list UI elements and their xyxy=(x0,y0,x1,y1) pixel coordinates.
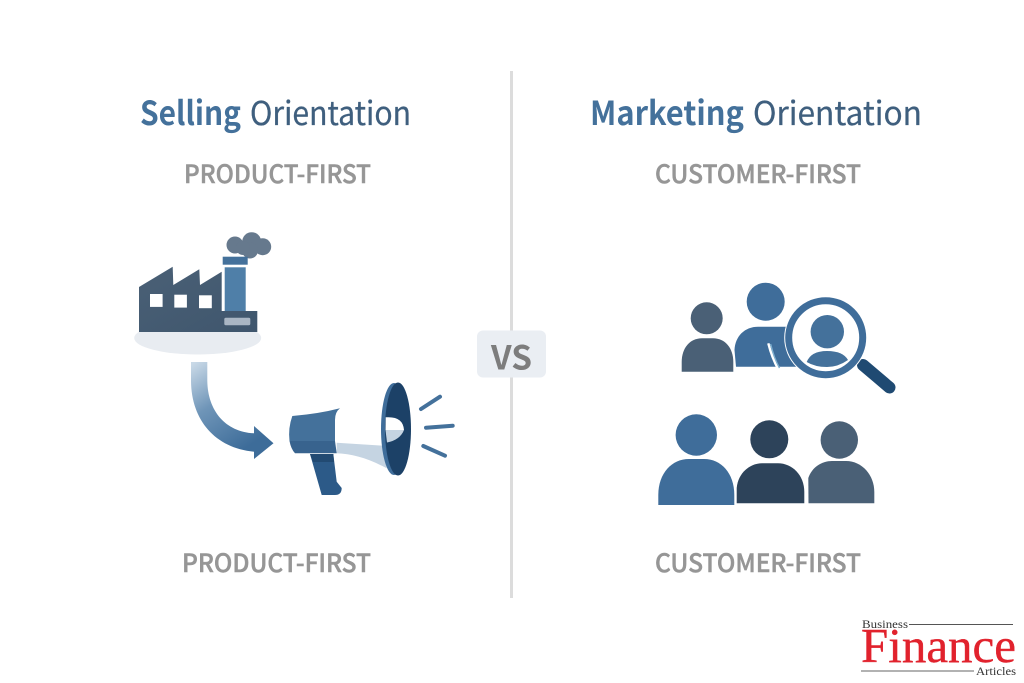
heading: selling orientation: Selling xyxy=(140,87,241,135)
heading: marketing orientation: Orientation xyxy=(753,87,922,135)
vs badge: VS xyxy=(490,332,532,380)
icon: magnifying glass xyxy=(784,296,890,388)
subheading: customer-first bottom: CUSTOMER-FIRST xyxy=(655,544,861,580)
icon: person centre, lower row xyxy=(737,420,804,503)
logo: business finance articles: Business xyxy=(862,619,909,631)
heading: marketing orientation: Marketing xyxy=(590,87,744,135)
logo: business finance articles: Finance xyxy=(861,618,1016,673)
subheading: customer-first top: CUSTOMER-FIRST xyxy=(655,155,861,191)
heading: marketing orientation xyxy=(590,87,922,135)
heading: selling orientation xyxy=(140,87,411,135)
icon: person centre, upper row xyxy=(734,283,800,369)
icon: person left, upper row xyxy=(682,302,733,372)
vs badge xyxy=(477,330,546,380)
icon: factory xyxy=(134,232,271,354)
icon: person left, lower row xyxy=(658,414,734,505)
arrow: factory to megaphone xyxy=(191,362,274,459)
heading: selling orientation: Orientation xyxy=(250,87,411,135)
subheading: product-first bottom: PRODUCT-FIRST xyxy=(182,544,371,580)
logo: business finance articles: Articles xyxy=(976,666,1017,678)
icon: person right, lower row xyxy=(808,421,874,503)
centre divider xyxy=(510,71,513,598)
icon: megaphone xyxy=(289,382,453,495)
subheading: product-first top: PRODUCT-FIRST xyxy=(184,155,371,191)
